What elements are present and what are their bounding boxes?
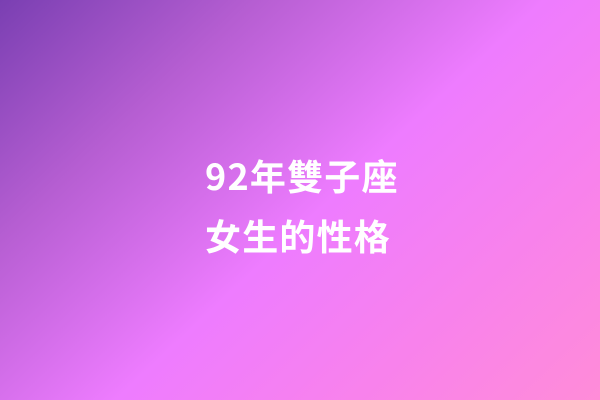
title [205, 149, 399, 261]
title line 2: 女生的性格 [205, 209, 391, 261]
title line 1: 92年雙子座 [205, 149, 399, 201]
